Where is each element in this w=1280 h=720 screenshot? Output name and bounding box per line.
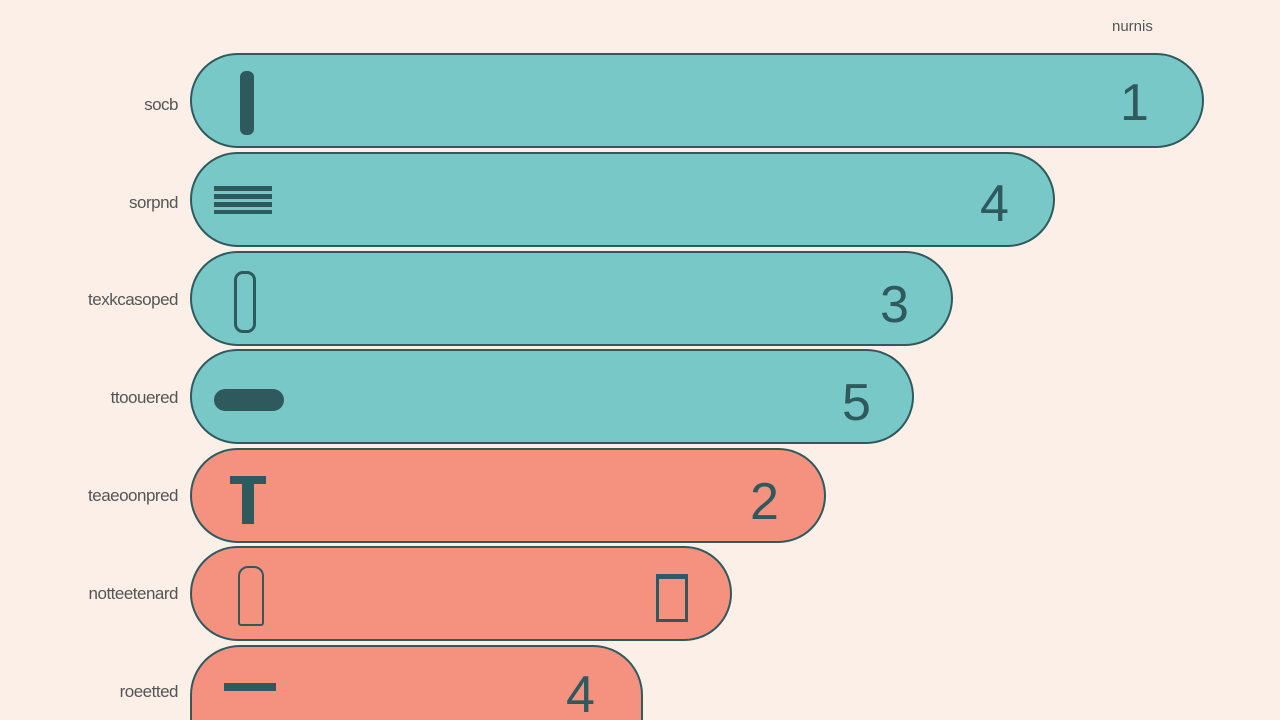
icon: cup xyxy=(656,574,688,622)
bar 4 xyxy=(190,349,914,444)
label 3: texkcasoped xyxy=(88,290,178,309)
bar 3 xyxy=(190,251,953,346)
bar 2 xyxy=(190,152,1055,247)
bar 1 xyxy=(190,53,1204,148)
label 2: sorpnd xyxy=(129,193,178,212)
icon: capsule xyxy=(214,389,284,411)
legend label: nurnis xyxy=(1112,18,1153,35)
label 5: teaeoonpred xyxy=(88,486,178,505)
icon: T tool xyxy=(230,476,266,520)
bar 6 xyxy=(190,546,732,641)
icon: pen xyxy=(240,71,254,135)
label 7: roeetted xyxy=(120,682,178,701)
icon: clip xyxy=(234,271,256,333)
bar 5 xyxy=(190,448,826,543)
value: 3 xyxy=(880,276,909,334)
label 1: socb xyxy=(144,95,178,114)
label 6: notteetenard xyxy=(89,584,178,603)
bar 7 xyxy=(190,645,643,720)
value: 4 xyxy=(980,175,1009,233)
value: 5 xyxy=(842,374,871,432)
value: 2 xyxy=(750,473,779,531)
icon: bottle xyxy=(214,186,272,214)
icon: T bar xyxy=(224,683,276,691)
value: 1 xyxy=(1120,74,1149,132)
label 4: ttoouered xyxy=(111,388,178,407)
icon: bottle outline xyxy=(238,566,264,626)
